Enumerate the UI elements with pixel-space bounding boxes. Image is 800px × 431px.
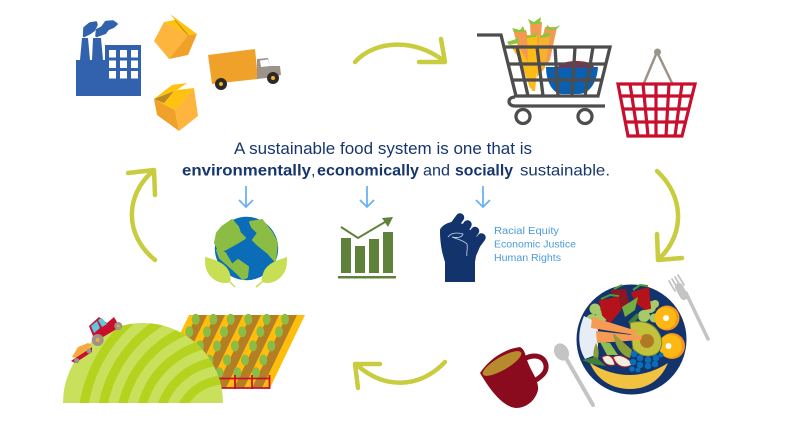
heading: sustainable food system statement: and xyxy=(423,162,450,180)
icon: red fence xyxy=(218,375,270,389)
arrow: top curved arrow xyxy=(355,39,445,62)
icon: red mug xyxy=(480,347,546,408)
arrow: down to economy xyxy=(360,186,374,207)
strawberries xyxy=(612,290,628,309)
chart: rising bars with trend arrow xyxy=(338,217,396,278)
arrow: right curved arrow xyxy=(657,171,682,260)
banana xyxy=(590,363,668,389)
oranges xyxy=(654,306,680,330)
text block: social sustainability list: Racial Equity xyxy=(494,226,559,237)
arrow: left curved arrow xyxy=(128,170,155,260)
text block: social sustainability list: Human Rights xyxy=(494,253,561,264)
heading: sustainable food system statement xyxy=(182,140,610,180)
heading: sustainable food system statement: economically xyxy=(317,162,419,180)
icon: crop field xyxy=(154,314,305,388)
grapes xyxy=(586,300,659,326)
apple slices xyxy=(602,356,615,365)
icon: raised fist xyxy=(440,218,482,282)
icon: upper cardboard box xyxy=(154,14,197,59)
blueberries xyxy=(629,351,664,372)
arrow: down to environment xyxy=(239,186,253,207)
icon: tractor pulling trailer xyxy=(71,317,122,363)
heading: sustainable food system statement: environmentally xyxy=(182,162,311,180)
icon: spoon xyxy=(551,341,593,405)
icon: globe with leaves xyxy=(205,217,287,287)
arrow: down to social xyxy=(476,186,490,207)
leaves xyxy=(622,297,638,317)
icon: factory xyxy=(76,22,141,96)
carrots xyxy=(591,317,637,335)
heading: sustainable food system statement: , xyxy=(311,162,315,180)
coconut xyxy=(579,316,598,359)
icon: striped green hill xyxy=(63,323,223,403)
icon: plate of food xyxy=(576,284,686,394)
icon: delivery truck xyxy=(208,49,281,90)
avocado xyxy=(630,322,662,356)
arrow: bottom curved arrow xyxy=(355,362,445,388)
icon: shopping cart with produce xyxy=(477,17,610,124)
carrots and bowl xyxy=(507,17,598,94)
text block: social sustainability list xyxy=(494,226,576,264)
text block: social sustainability list: Economic Justice xyxy=(494,240,576,250)
leaf and greens xyxy=(613,333,632,358)
icon: red shopping basket xyxy=(618,48,695,136)
icon: fork xyxy=(669,275,708,339)
heading: sustainable food system statement: A sustainable food system is one that is xyxy=(234,140,532,158)
icon: lower cardboard box xyxy=(154,83,198,131)
heading: sustainable food system statement: sustainable. xyxy=(520,162,610,180)
heading: sustainable food system statement: socially xyxy=(455,162,513,180)
